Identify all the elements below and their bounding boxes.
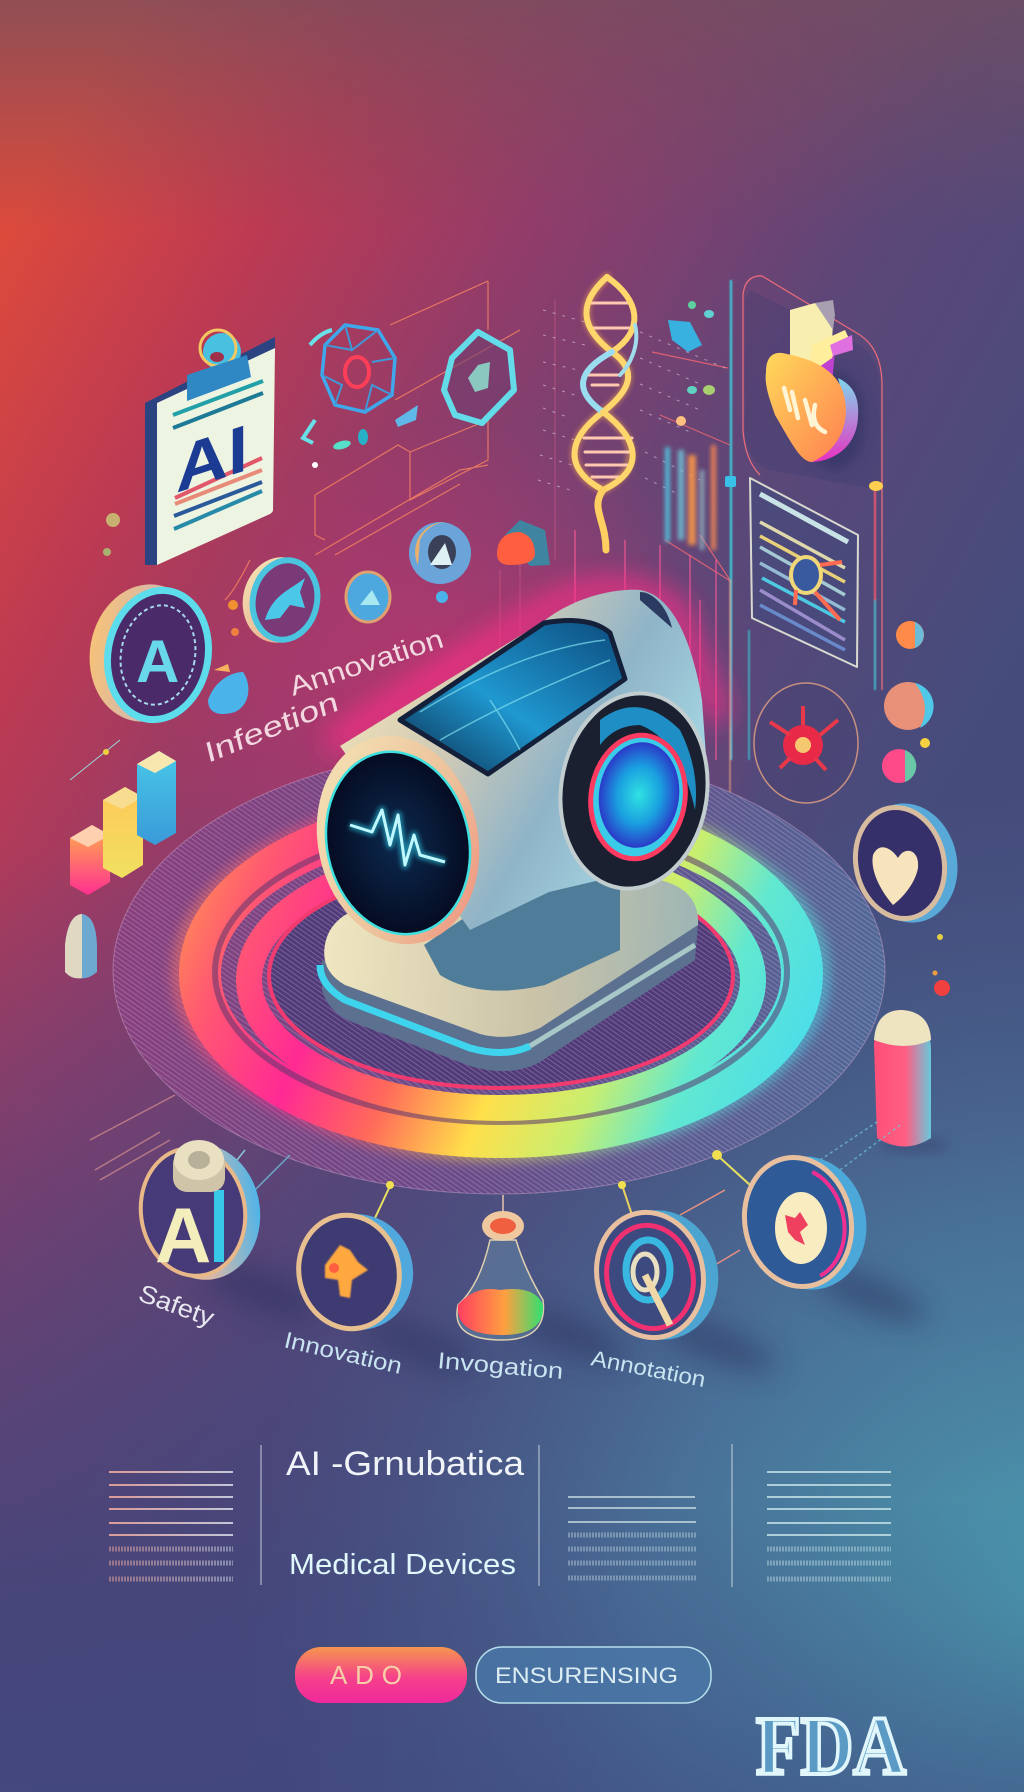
icon: small capsule xyxy=(65,914,97,978)
icon: dna helix xyxy=(574,277,636,550)
label: Annotation: Annotation xyxy=(589,1345,708,1392)
bar chart icon xyxy=(70,740,176,895)
icon: AI bottle coin xyxy=(133,1137,269,1287)
icon: blue coin xyxy=(346,572,390,622)
circuit lines behind icons xyxy=(225,281,732,720)
ring platform xyxy=(113,748,885,1194)
icon: cross coin xyxy=(733,1145,879,1301)
icon: bird coin xyxy=(235,550,325,650)
waveform xyxy=(350,810,445,865)
label: Safety: Safety xyxy=(135,1279,218,1333)
pink neon lines above device xyxy=(575,530,716,760)
node dot xyxy=(869,481,883,491)
dotted grid behind DNA xyxy=(538,310,725,495)
device: cylinder body xyxy=(340,590,707,930)
connectors to lower icons xyxy=(90,1095,900,1265)
small floating marks xyxy=(103,405,418,672)
text block: left column lines xyxy=(109,1472,233,1579)
icon: floating pills xyxy=(882,621,934,783)
heading: Medical Devices: Medical Devices xyxy=(289,1549,516,1581)
logo: FDA: FDA xyxy=(756,1700,906,1792)
neon vertical lines xyxy=(730,280,875,830)
icon: dots xyxy=(932,934,950,996)
label: Infeetion: Infeetion xyxy=(202,685,341,769)
panel: heart card xyxy=(725,276,883,690)
icon: heart coin xyxy=(845,794,968,932)
device glow xyxy=(330,590,720,745)
icon: flask xyxy=(457,1211,543,1340)
clipboard title: AI xyxy=(176,411,248,508)
coin letter: A xyxy=(155,1191,211,1279)
icon: tall capsule xyxy=(874,1010,950,1153)
badge letter: A xyxy=(136,628,179,695)
icon: glowing node xyxy=(676,416,686,426)
icon: clipboard with AI xyxy=(145,330,275,565)
ring glow xyxy=(179,794,823,1154)
text block: third column lines xyxy=(568,1497,697,1578)
icon: cyan hexagon xyxy=(444,332,514,423)
device: neck xyxy=(424,875,620,991)
icon: no-magnifier coin xyxy=(585,1199,730,1351)
button: Ensuring xyxy=(476,1647,711,1703)
icon: ring with drop xyxy=(409,522,471,603)
panel: document chart xyxy=(750,478,858,667)
icon: flower coin xyxy=(288,1204,424,1340)
inner color ring xyxy=(249,852,753,1108)
platform disc xyxy=(113,748,885,1194)
text block: fourth column lines xyxy=(767,1472,891,1579)
icon: heart lock xyxy=(766,300,858,462)
icon: small gem cluster xyxy=(668,301,715,395)
icon: blue blob xyxy=(208,672,248,714)
device screen xyxy=(400,621,625,774)
label: Annovation: Annovation xyxy=(286,624,447,702)
dividers xyxy=(261,1444,732,1587)
device: front face xyxy=(298,721,498,959)
device: base xyxy=(320,880,698,1071)
outer color ring xyxy=(200,811,802,1137)
colored light bars xyxy=(665,445,716,550)
icon: A badge xyxy=(79,575,219,731)
icon shadows xyxy=(197,1249,932,1384)
icon: red apple shape xyxy=(497,520,550,566)
button: ADO: ADO xyxy=(330,1660,402,1690)
button: Ensuring: ENSURENSING xyxy=(495,1663,678,1688)
heading: AI guidance: AI -Grnubatica xyxy=(286,1445,524,1483)
device: right lens xyxy=(548,684,720,898)
icon: red target circle xyxy=(754,683,858,803)
icon: wireframe gem xyxy=(303,325,395,443)
label: Innovation: Innovation xyxy=(282,1327,405,1379)
button: ADO xyxy=(295,1647,467,1703)
lens iris xyxy=(592,737,686,853)
label: Invogation: Invogation xyxy=(437,1347,564,1384)
